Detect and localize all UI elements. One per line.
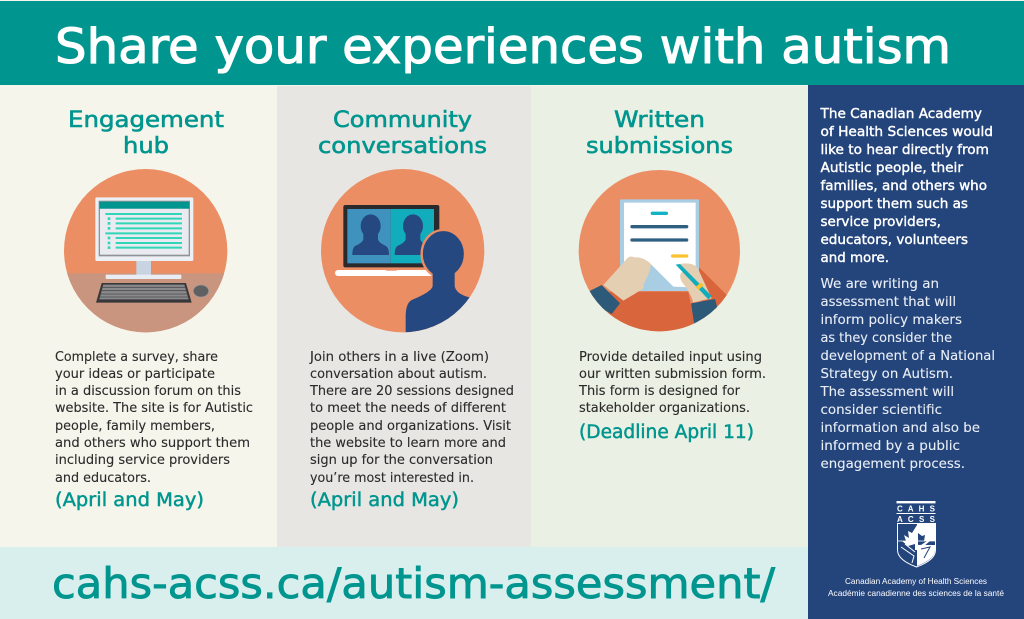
heading: community conversations: conversations [318,134,487,159]
heading: written submissions [586,108,733,159]
text block: who we want to hear from: educators, volunteers [820,233,968,248]
text block: who we want to hear from: families, and others who [820,179,987,194]
text block: about the assessment: consider scientific [820,403,942,418]
text block: community conversations description: to meet the needs of different [310,401,506,416]
text block: about the assessment [819,277,995,472]
text block: written submissions description [578,350,766,416]
text block: engagement hub description: including service providers [55,453,230,468]
text block: about the assessment: as they consider the [820,331,952,346]
text block: written submissions description: stakeholder organizations. [579,401,750,416]
text block: community conversations description: Join others in a live (Zoom) [309,350,489,365]
text block: who we want to hear from: support them such as [820,197,968,212]
organization name: Académie canadienne des sciences de la santé [828,588,1004,598]
text block: about the assessment: informed by a public [820,439,960,454]
text block: who we want to hear from [819,107,993,266]
title: Share your experiences with autism [55,19,951,75]
text block: about the assessment: Strategy on Autism. [820,367,953,382]
text block: who we want to hear from: service providers, [820,215,941,230]
text block: written submissions description: This form is designed for [578,384,741,399]
text block: about the assessment: We are writing an [820,277,939,292]
date: deadline april 11: (Deadline April 11) [579,422,754,443]
panel: written submissions [531,86,808,547]
text block: written submissions description: our written submission form. [579,367,766,382]
logo: CAHS ACSS shield [896,501,936,567]
text block: written submissions description: Provide detailed input using [579,350,762,365]
icon: video call on laptop [321,169,490,340]
text block: community conversations description: the website to learn more and [310,436,506,451]
panel: engagement hub [55,110,252,510]
date: april and may: (April and May) [55,490,204,511]
heading: written submissions: submissions [586,134,733,159]
text block: about the assessment: assessment that will [820,295,956,310]
text block: who we want to hear from: of Health Sciences would [820,125,993,140]
text block: community conversations description: people and organizations. Visit [310,419,511,434]
text block: engagement hub description: and others who support them [55,436,250,451]
text block: community conversations description: you’re most interested in. [310,471,474,486]
date: april and may: (April and May) [310,490,459,511]
text block: engagement hub description: your ideas or participate [55,367,215,382]
text block: community conversations description: conversation about autism. [310,367,487,382]
icon: desktop computer on desk [60,169,233,337]
url band [0,547,808,619]
text block: who we want to hear from: and more. [820,251,889,266]
heading: community conversations [318,108,487,159]
text block: engagement hub description: website. The site is for Autistic [55,401,253,416]
panel: about the academy [808,85,1024,619]
text block: who we want to hear from: The Canadian Academy [819,107,982,122]
text block: about the assessment: engagement process. [820,457,965,472]
heading: engagement hub: hub [123,134,169,159]
text block: engagement hub description [55,350,253,486]
website url: cahs-acss.ca/autism-assessment/ [52,559,776,608]
text block: who we want to hear from: like to hear directly from [820,143,989,158]
logo: CAHS ACSS shield: A C S S [897,515,936,524]
text block: about the assessment: The assessment will [819,385,954,400]
header banner [0,1,1024,85]
text block: about the assessment: development of a National [820,349,995,364]
text block: community conversations description: sign up for the conversation [310,453,493,468]
text block: about the assessment: information and also be [820,421,980,436]
organization name [828,576,1004,598]
heading: engagement hub: Engagement [68,108,224,133]
panel: community conversations [277,86,531,547]
text block: who we want to hear from: Autistic people, their [820,161,964,176]
text block: engagement hub description: Complete a survey, share [55,350,218,365]
heading: community conversations: Community [333,108,472,133]
text block: community conversations description [309,350,514,486]
icon: hands writing on a form [579,170,740,333]
heading: written submissions: Written [614,108,705,133]
text block: community conversations description: There are 20 sessions designed [309,384,514,399]
logo: CAHS ACSS shield: C A H S [897,504,936,514]
text block: engagement hub description: people, family members, [55,419,215,434]
heading: engagement hub [68,108,224,159]
text block: about the assessment: inform policy makers [820,313,962,328]
text block: engagement hub description: in a discussion forum on this [55,384,241,399]
organization name: Canadian Academy of Health Sciences [845,576,987,586]
text block: engagement hub description: and educators. [55,471,151,486]
